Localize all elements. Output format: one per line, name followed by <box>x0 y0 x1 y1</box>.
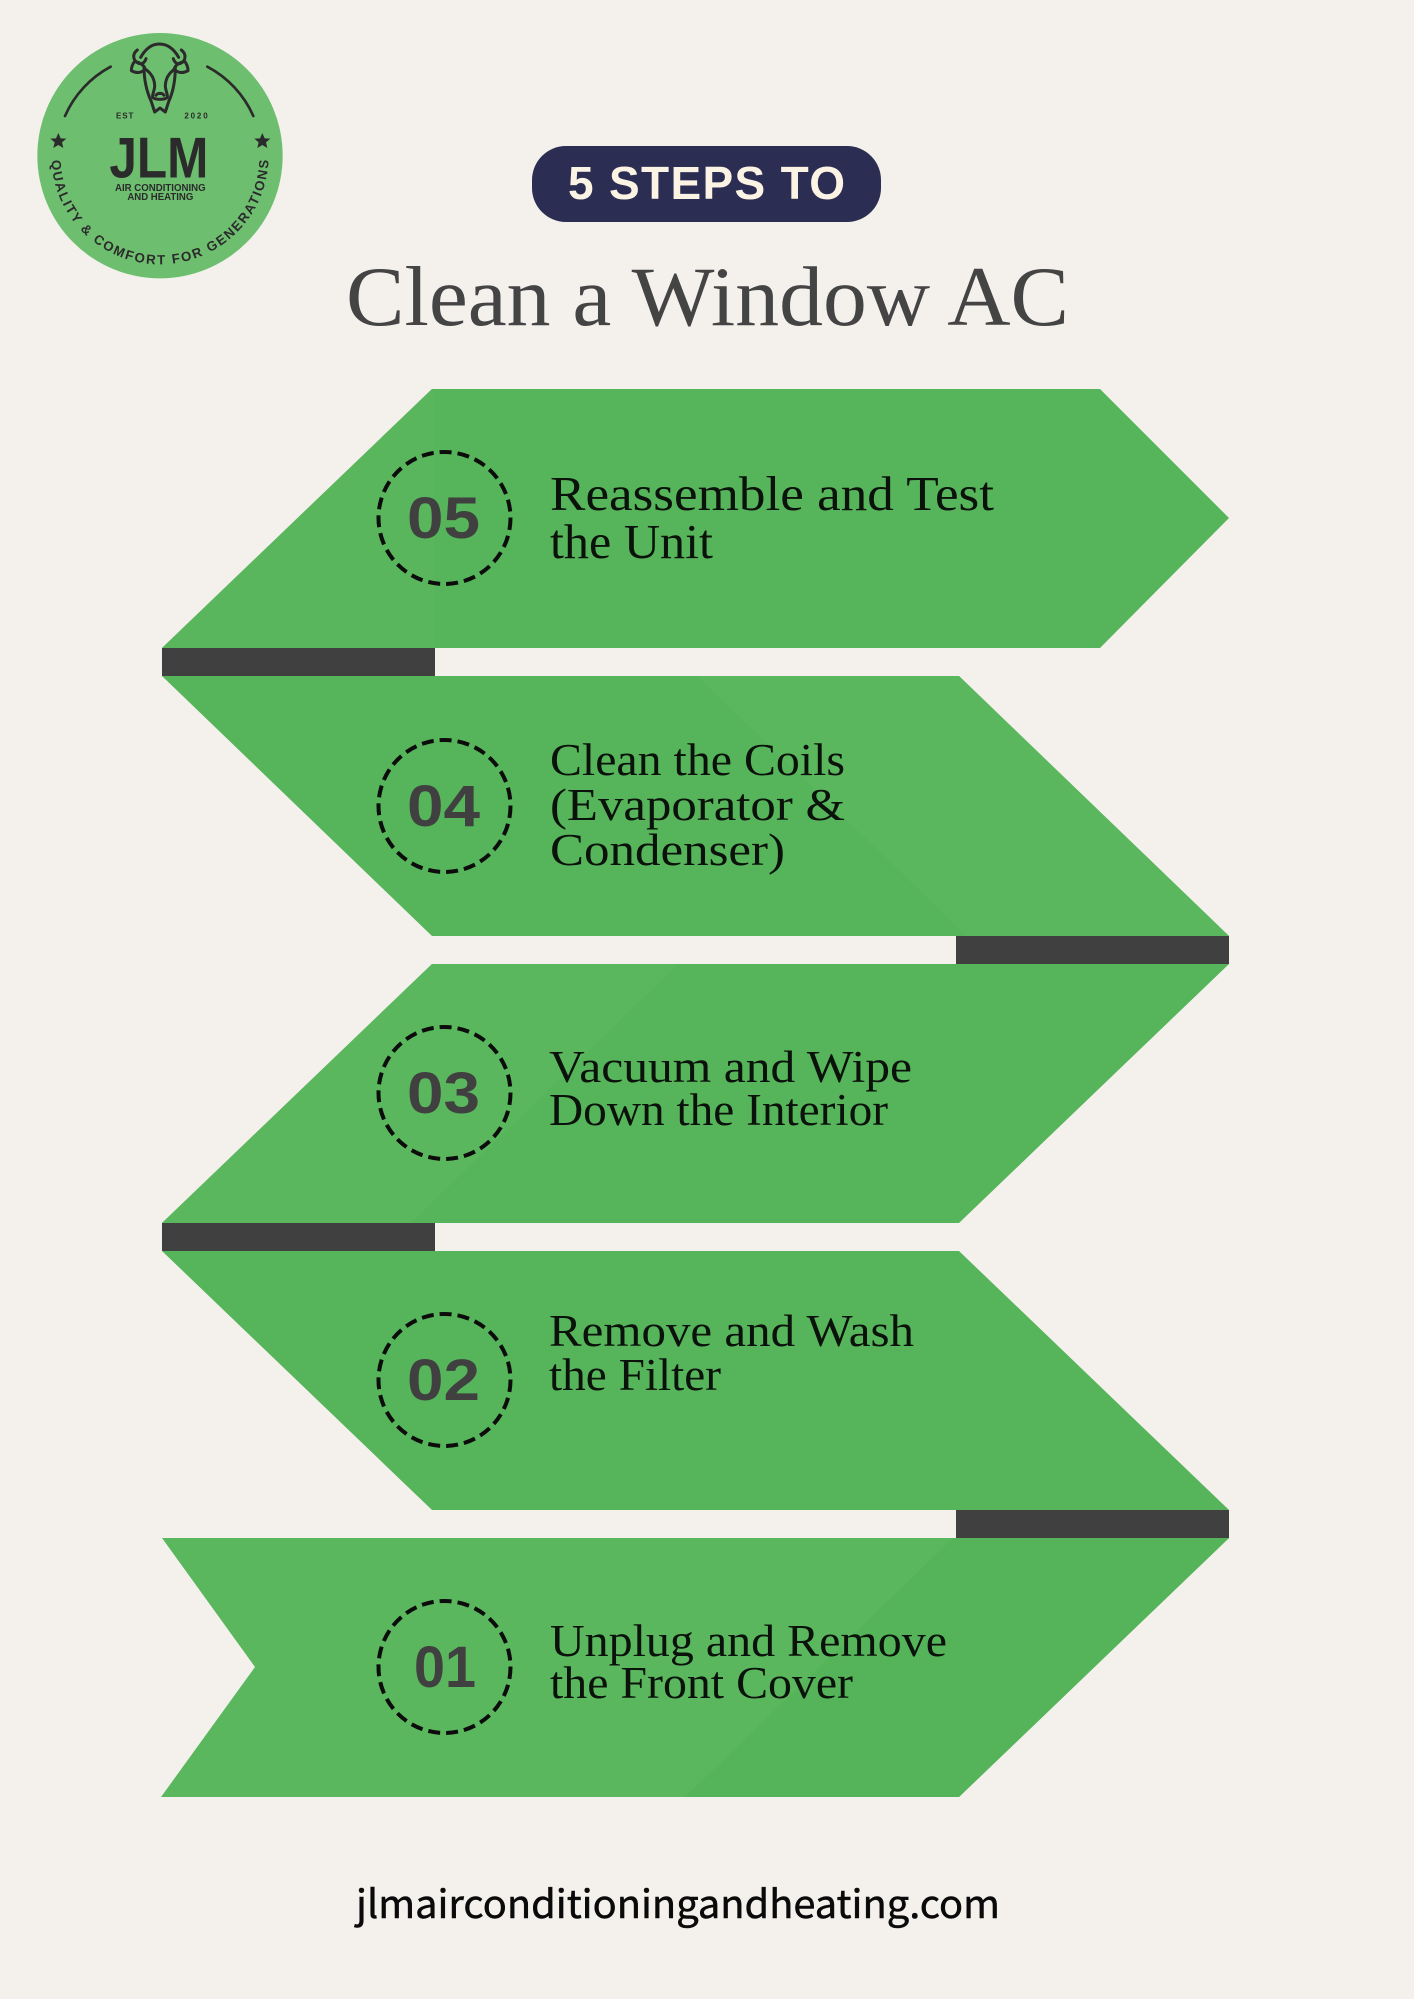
step 01 label <box>550 1616 947 1708</box>
step 02 label <box>549 1306 914 1400</box>
title: Clean a Window AC <box>346 250 1069 344</box>
step 03 label <box>549 1042 912 1135</box>
step 03 connector bar <box>162 1223 435 1251</box>
pill heading: 5 STEPS TO <box>568 157 845 209</box>
step 04 label <box>550 734 845 875</box>
step 01 number badge: 01 <box>414 1635 476 1700</box>
panel: step 05 <box>162 389 1229 676</box>
logo stars <box>50 133 270 148</box>
step 03 label: Vacuum and Wipe <box>549 1042 912 1092</box>
step 01 number badge <box>378 1601 510 1733</box>
step 01 label: Unplug and Remove <box>550 1616 947 1666</box>
step 01 label: the Front Cover <box>550 1658 853 1708</box>
step 03 label: Down the Interior <box>549 1085 888 1135</box>
panel: step 04 <box>162 676 1229 964</box>
step 02 connector bar <box>956 1510 1229 1538</box>
pill heading <box>532 146 881 222</box>
logo established date <box>116 111 208 120</box>
logo arcs <box>65 67 253 116</box>
step 02 number badge: 02 <box>407 1348 480 1413</box>
footer website: jlmairconditioningandheating.com <box>354 1874 1000 1930</box>
step 04 label: (Evaporator & <box>550 779 845 830</box>
step 05 label <box>550 466 994 569</box>
icon: bison head <box>131 44 188 112</box>
step 05 connector bar <box>162 648 435 676</box>
panel: step 01 <box>161 1538 1229 1797</box>
step 03 number badge: 03 <box>407 1061 480 1126</box>
step 05 number badge <box>378 452 510 584</box>
step 04 number badge: 04 <box>407 774 480 839</box>
logo established date: 2020 <box>184 111 208 120</box>
panel: step 02 <box>162 1251 1229 1538</box>
step 05 label: the Unit <box>550 514 713 569</box>
step 04 number badge <box>378 740 510 872</box>
step 04 label: Condenser) <box>550 824 785 875</box>
step 05 number badge: 05 <box>407 486 480 551</box>
logo curved tagline: QUALITY & COMFORT FOR GENERATIONS <box>49 160 268 264</box>
logo subtitle <box>115 183 206 203</box>
panel: step 03 <box>162 964 1229 1251</box>
logo subtitle: AND HEATING <box>127 192 194 203</box>
logo wordmark: JLM <box>109 126 208 190</box>
step 04 label: Clean the Coils <box>550 734 845 785</box>
logo established date: EST <box>116 111 133 120</box>
step 02 number badge <box>378 1314 510 1446</box>
step 03 number badge <box>378 1027 510 1159</box>
step 04 connector bar <box>956 936 1229 964</box>
logo subtitle: AIR CONDITIONING <box>115 183 206 194</box>
step 05 label: Reassemble and Test <box>550 466 994 521</box>
step 02 label: the Filter <box>549 1350 721 1400</box>
step 02 label: Remove and Wash <box>549 1306 914 1356</box>
logo badge <box>37 33 283 278</box>
